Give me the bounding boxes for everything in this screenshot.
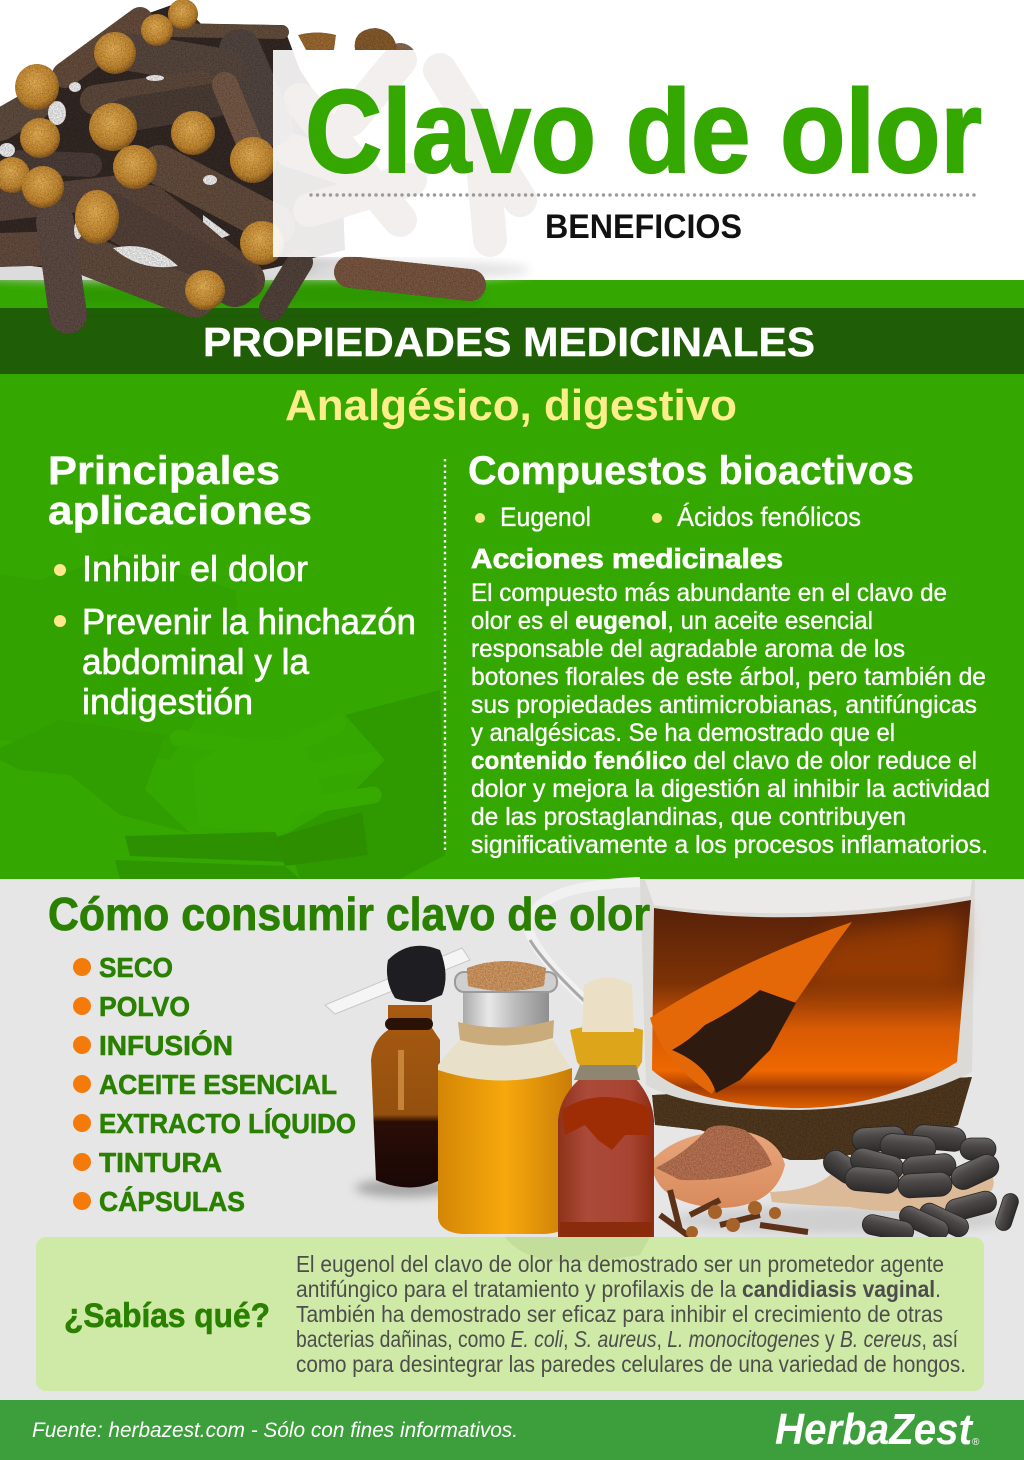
- faint objects behind callout: [505, 1237, 650, 1262]
- source note: Fuente: herbazest.com - Sólo con fines informativos.: [32, 1419, 518, 1442]
- image: cloves photo: [0, 0, 530, 315]
- neck ring: [385, 1018, 433, 1030]
- mug glass: [640, 880, 975, 1110]
- sleeve: [0, 720, 190, 833]
- dotted divider: [311, 193, 978, 197]
- cork: [582, 978, 634, 1032]
- belt buckle: [273, 812, 368, 866]
- image: mug of tea: [528, 880, 975, 1160]
- capsules: [819, 1124, 1020, 1243]
- paragraph: responsable del agradable aroma de los: [471, 635, 905, 663]
- paragraph: olor es el eugenol, un aceite esencial: [471, 607, 873, 635]
- bottle cap: [387, 946, 446, 1002]
- clove shadows: [0, 254, 530, 306]
- powder: [656, 1125, 772, 1180]
- torso right: [285, 690, 445, 879]
- vertical dotted divider: [444, 459, 446, 852]
- bottle body: [371, 1005, 440, 1188]
- glass collar: [574, 1065, 640, 1080]
- item: seco: SECO: [99, 952, 173, 983]
- list: consumption forms: [73, 952, 356, 1217]
- gaps between cloves: [0, 75, 230, 267]
- jar shoulder: [438, 1040, 572, 1234]
- jar rim: [455, 972, 557, 992]
- dark red flame: [562, 1097, 650, 1150]
- faded background cloves: [290, 60, 520, 240]
- dark title band: [0, 308, 1024, 374]
- image: dropper bottle: [325, 946, 470, 1197]
- paragraph: de las prostaglandinas, que contribuyen: [471, 803, 906, 831]
- spoon: [770, 1165, 994, 1211]
- paragraph: contenido fenólico del clavo de olor reduce el: [471, 747, 977, 775]
- paragraph: [471, 579, 990, 859]
- oil: [438, 1068, 572, 1234]
- belt: [125, 832, 290, 862]
- mug handle: [528, 882, 640, 1005]
- trousers: [115, 860, 300, 879]
- shadow: [670, 1206, 1010, 1234]
- item: polvo: POLVO: [99, 991, 190, 1022]
- bottle shadow: [355, 1179, 455, 1197]
- upper right tint: [800, 915, 960, 985]
- panel: principal applications: [48, 449, 416, 722]
- callout box: [36, 1237, 984, 1391]
- registered mark: ®: [972, 1437, 980, 1448]
- glass rim highlight: [645, 880, 972, 913]
- item: aceite esencial: ACEITE ESENCIAL: [99, 1069, 337, 1100]
- bullet 1: Inhibir el dolor: [82, 548, 308, 589]
- logo: HerbaZest: [775, 1405, 974, 1454]
- bowl: [654, 1130, 785, 1208]
- saucer: [652, 1077, 972, 1160]
- tea bag: [650, 922, 852, 1094]
- callout text: antifúngico para el tratamiento y profilaxis de la candidiasis vaginal.: [296, 1276, 941, 1302]
- bullet 2: indigestión: [82, 681, 253, 722]
- compound: eugenol: Eugenol: [500, 502, 591, 532]
- panel: bioactive compounds: [468, 449, 990, 859]
- tea liquid: [652, 900, 971, 1108]
- panel: how to consume background: [0, 879, 1024, 1400]
- clove pile: [0, 0, 520, 315]
- item: extracto liquido: EXTRACTO LÍQUIDO: [99, 1108, 356, 1139]
- small cloves: [660, 1190, 808, 1237]
- header white fade: [545, 0, 1024, 280]
- footer bar: [0, 1400, 1024, 1460]
- heading: how to consume: Cómo consumir clavo de olor: [48, 888, 650, 940]
- title overlay panel: [273, 50, 1024, 257]
- bottle body: [558, 1075, 654, 1237]
- yellow neck: [570, 1025, 643, 1078]
- paragraph: dolor y mejora la digestión al inhibir la actividad: [471, 775, 990, 803]
- paragraph: sus propiedades antimicrobianas, antifúngicas: [471, 691, 977, 719]
- section subheading: Analgésico, digestivo: [285, 381, 737, 430]
- section heading: PROPIEDADES MEDICINALES: [203, 319, 815, 365]
- header background: [0, 0, 1024, 280]
- callout heading: ¿Sabías qué?: [64, 1297, 270, 1335]
- footer: [0, 1400, 1024, 1460]
- subtitle: BENEFICIOS: [545, 208, 742, 246]
- heading: compuestos bioactivos: Compuestos bioactivos: [468, 449, 914, 493]
- bullet 2: [54, 601, 416, 722]
- compound: phenolic acids: Ácidos fenólicos: [677, 502, 861, 532]
- tea bag contents: [672, 990, 796, 1093]
- top cloves: [298, 32, 336, 50]
- callout text: El eugenol del clavo de olor ha demostrado ser un prometedor agente: [296, 1251, 944, 1277]
- panel: hand background photo: [0, 555, 445, 879]
- item: tintura: TINTURA: [99, 1147, 222, 1178]
- image: bowl of powder and spoon of capsules: [654, 1124, 1020, 1243]
- callout text: bacterias dañinas, como E. coli, S. aureus, L. monocitogenes y B. cereus, así: [296, 1326, 959, 1352]
- heading: principales aplicaciones: aplicaciones: [48, 489, 312, 533]
- callout text: como para desintegrar las paredes celulares de una variedad de hongos.: [296, 1351, 966, 1377]
- callout text: También ha demostrado ser eficaz para inhibir el crecimiento de otras: [296, 1301, 943, 1327]
- clove buds: [0, 0, 284, 310]
- hand: [178, 724, 373, 830]
- bottle highlight: [398, 1050, 404, 1110]
- heading: principales aplicaciones: Principales: [48, 449, 280, 493]
- paragraph: significativamente a los procesos inflamatorios.: [471, 831, 988, 859]
- clove stems: [0, 20, 470, 315]
- paragraph: botones florales de este árbol, pero también de: [471, 663, 986, 691]
- callout text: [296, 1251, 966, 1377]
- green band: [0, 280, 1024, 880]
- cork: [467, 961, 546, 991]
- clove heads: [686, 1201, 781, 1238]
- base sediment: [560, 1222, 652, 1237]
- shirt: [0, 555, 250, 760]
- pipette: [325, 948, 470, 1014]
- bullet 2: abdominal y la: [82, 641, 310, 682]
- subheading: medicinal actions: Acciones medicinales: [471, 543, 783, 574]
- image: red oil bottle: [558, 978, 654, 1237]
- paragraph: y analgésicas. Se ha demostrado que el: [471, 719, 895, 747]
- mug handle edge: [530, 940, 596, 1012]
- pile base: [0, 2, 345, 285]
- bullet 2: Prevenir la hinchazón: [82, 601, 416, 642]
- paragraph: El compuesto más abundante en el clavo de: [471, 579, 947, 607]
- image: amber oil jar: [438, 961, 572, 1234]
- item: infusion: INFUSIÓN: [99, 1030, 233, 1061]
- callout: did you know: [36, 1237, 984, 1391]
- jar neck: [463, 985, 549, 1035]
- rope: [458, 1020, 554, 1046]
- item: capsulas: CÁPSULAS: [99, 1186, 245, 1217]
